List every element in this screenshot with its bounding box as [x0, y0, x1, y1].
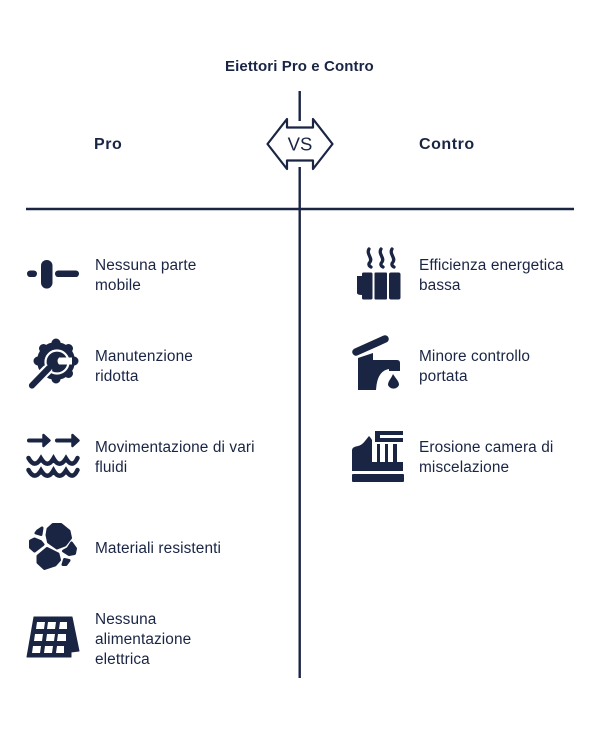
icon: solar panel — [27, 617, 79, 657]
text: contro 2 — [419, 348, 530, 385]
text: contro 1 — [419, 257, 564, 294]
text: pro 5 — [95, 611, 191, 668]
text: pro 5: Nessuna — [95, 611, 156, 628]
text: pro 4: Materiali resistenti — [95, 540, 221, 557]
vs badge: VS — [288, 134, 312, 155]
icon: gear and wrench — [31, 342, 75, 386]
text: pro 3: Movimentazione di vari — [95, 439, 255, 456]
text: contro 3 — [419, 439, 553, 476]
vs badge — [268, 119, 332, 169]
text: pro 1: Nessuna parte — [95, 257, 196, 274]
heading: pro: Pro — [94, 136, 122, 153]
icon: erosion chamber — [352, 431, 404, 482]
icon: faucet — [356, 339, 400, 390]
text: contro 3: miscelazione — [419, 459, 509, 476]
heading: contro: Contro — [419, 136, 475, 153]
text: pro 1 — [95, 257, 196, 294]
text: pro 2: Manutenzione — [95, 348, 193, 365]
text: contro 1: bassa — [419, 277, 461, 294]
text: pro 2: ridotta — [95, 368, 138, 385]
text: contro 3: Erosione camera di — [419, 439, 553, 456]
text: pro 5: elettrica — [95, 651, 150, 668]
text: pro 2 — [95, 348, 193, 385]
text: pro 1: mobile — [95, 277, 141, 294]
text: pro 3 — [95, 439, 255, 476]
icon: heat and energy — [357, 249, 400, 300]
icon: fluids — [28, 435, 78, 476]
icon: stones — [30, 524, 76, 568]
icon: no moving parts — [27, 260, 79, 288]
text: contro 2: portata — [419, 368, 468, 385]
text: pro 3: fluidi — [95, 459, 127, 476]
text: contro 2: Minore controllo — [419, 348, 530, 365]
title: Eiettori Pro e Contro — [225, 58, 374, 75]
text: contro 1: Efficienza energetica — [419, 257, 564, 274]
central axis lines — [26, 91, 574, 678]
text: pro 5: alimentazione — [95, 631, 191, 648]
